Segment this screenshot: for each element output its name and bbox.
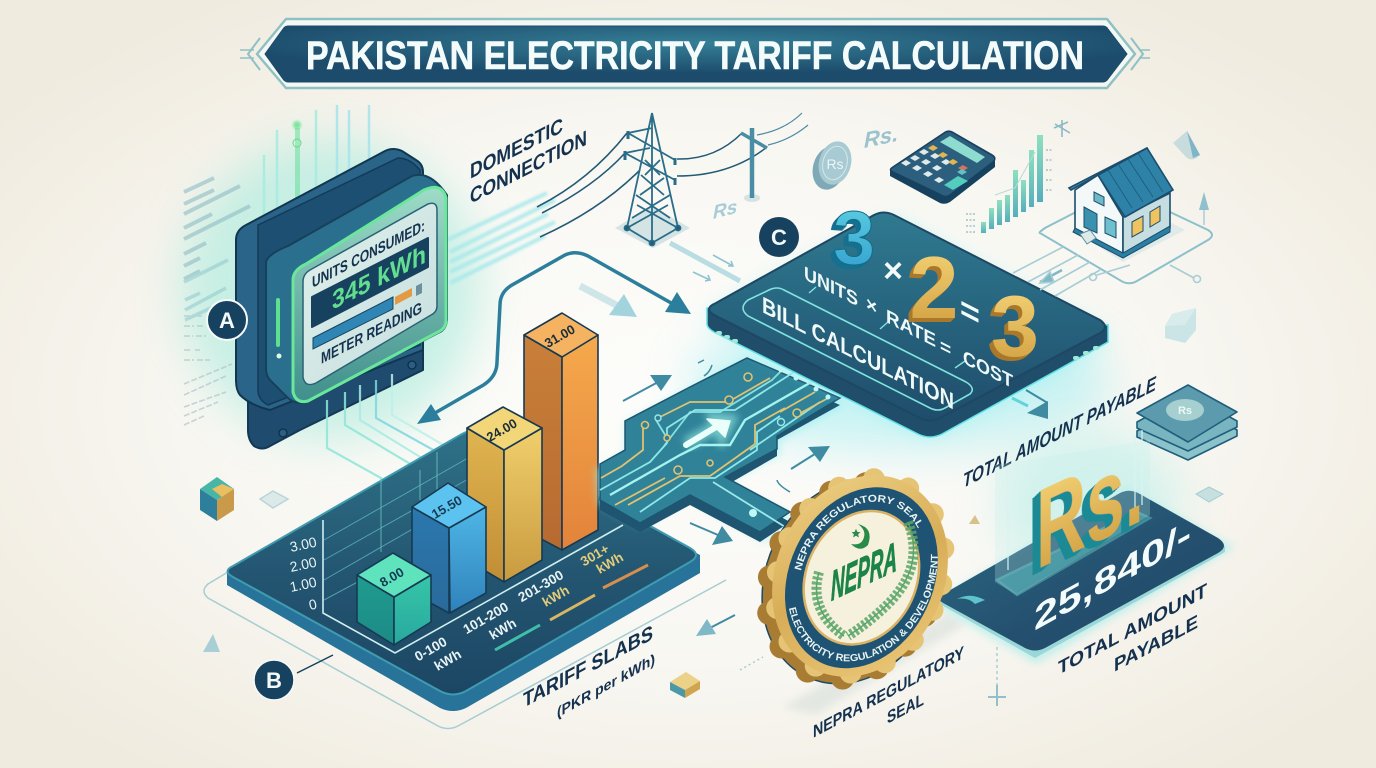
icon: small triangle (969, 515, 980, 524)
icon: money stack (1137, 385, 1237, 460)
y axis labels (288, 534, 318, 613)
decorations upper right (1165, 131, 1209, 343)
icon: cone (1173, 131, 1200, 159)
LED pill (276, 300, 280, 345)
seal: NEPRA: NEPRA (831, 533, 897, 610)
title text: PAKISTAN ELECTRICITY TARIFF CALCULATION (306, 34, 1084, 78)
icon: money stack: Rs (1178, 405, 1192, 417)
crescent and star (851, 524, 870, 549)
arrow toward seal bottom (696, 615, 735, 636)
big rs symbol: Rs. (1036, 418, 1144, 594)
bar: 0-100 (357, 553, 431, 645)
panel A: meter (236, 105, 447, 448)
rs labels and coin (713, 121, 898, 224)
house walls (1075, 175, 1123, 255)
chart outline (204, 572, 726, 728)
icon: cube (200, 477, 234, 521)
rs label: Rs. (864, 121, 898, 153)
arrow down from calculation (1012, 390, 1048, 419)
cream centre (782, 492, 940, 664)
seal: NEPRA: NEPRA REGULATORY SEAL (794, 494, 922, 570)
label: total amount payable bottom: PAYABLE (1114, 611, 1198, 677)
door and windows (1084, 207, 1097, 233)
progress bar (313, 297, 393, 349)
platform (227, 432, 700, 711)
x axis labels: kWh (540, 582, 572, 610)
panel C: bill calculation: COST (963, 347, 1014, 393)
circuit traces (600, 372, 830, 530)
icon: rs coin: Rs (826, 156, 844, 172)
arrow up right 2 (791, 446, 830, 469)
badge C (759, 217, 799, 257)
badge A: A (219, 308, 235, 333)
bill calculation box (743, 288, 972, 410)
panel C: bill calculation: = (940, 335, 951, 361)
meter reading label: METER READING (321, 298, 422, 368)
icon: glowing arrow (686, 418, 730, 445)
label: nepra regulatory seal (813, 642, 964, 742)
house plot (1040, 212, 1212, 283)
icon: up arrow (1203, 200, 1205, 225)
decorative data lines left of meter (184, 178, 250, 425)
icon: triangle (203, 634, 220, 652)
streams from meter to chart (327, 374, 445, 500)
label: nepra regulatory seal: NEPRA REGULATORY (813, 642, 964, 742)
numeral 2 gold: 2 (910, 238, 958, 337)
small mark (957, 596, 985, 604)
arrows around connector (623, 360, 830, 636)
y axis labels: 3.00 (288, 534, 318, 555)
circuit connector (595, 358, 845, 542)
arrow down right (690, 523, 733, 545)
panel C: bill calculation: RATE (886, 306, 936, 352)
arrow up right (623, 375, 672, 401)
bar: 301+ (524, 313, 598, 550)
legend dashes (495, 625, 540, 650)
badge A (207, 300, 247, 340)
bill calculation text: BILL CALCULATION (762, 292, 954, 415)
meter green frame (293, 187, 446, 402)
meter lower mount (248, 300, 423, 448)
seal edge (729, 449, 975, 713)
formula words: UNITS (804, 263, 858, 311)
icon: small diamond (1196, 487, 1223, 502)
panel C: bill calculation (707, 196, 1108, 437)
x axis labels: 101-200 (461, 599, 511, 637)
seal: NEPRA: ELECTRICITY REGULATION & DEVELOPMENT (789, 554, 938, 662)
house roof (1098, 148, 1173, 217)
bar: 101-200: 15.50 (429, 492, 465, 522)
seal face (740, 446, 980, 706)
ring lettering (801, 502, 922, 571)
glow base (997, 512, 1150, 595)
icon: diamond (260, 491, 288, 508)
icon: calculator (890, 131, 995, 204)
icon: glass cube (1165, 308, 1196, 343)
x axis labels: 301+ (578, 541, 612, 569)
house lines to panel (1013, 247, 1200, 296)
axis (323, 520, 623, 653)
label: total amount payable bottom: TOTAL AMOUNT (1058, 580, 1208, 680)
label: domestic connection: CONNECTION (470, 126, 587, 209)
meter back body (236, 149, 423, 410)
bar: 101-200 (412, 483, 486, 613)
icon: utility pole (741, 128, 767, 202)
seal ground shadow (783, 613, 965, 715)
navy ring (756, 462, 966, 693)
badge B: B (266, 668, 282, 693)
x axis labels: 0-100 (412, 634, 449, 664)
icon: power lines and streams (447, 113, 808, 283)
icon: rs coin (808, 138, 856, 193)
numeral 3 gold: 3 (991, 279, 1039, 375)
equals sign: = (960, 287, 980, 336)
icon: transmission tower (615, 113, 740, 281)
meter screen (303, 203, 437, 385)
dashed vertical (996, 647, 998, 688)
dotted line (740, 657, 763, 670)
label: nepra regulatory seal: SEAL (887, 688, 924, 728)
icon: house (1040, 148, 1212, 283)
bar: 201-300 (467, 407, 542, 582)
badge B (254, 655, 333, 700)
345 kWh reading: 345 kWh (332, 239, 426, 316)
badge C: C (771, 225, 787, 250)
x axis labels: 201-300 (516, 567, 566, 605)
y axis labels: 1.00 (288, 574, 318, 595)
rs label near tower: Rs (713, 197, 738, 224)
pale arrow (580, 286, 637, 317)
dark display (312, 238, 428, 327)
meter blue frame (266, 175, 447, 403)
x axis labels (412, 541, 626, 674)
background glows (180, 140, 1180, 570)
bar: 201-300: 24.00 (484, 415, 520, 445)
icon: small compass cross (1054, 120, 1070, 137)
glow streams above meter (264, 105, 369, 222)
x axis labels: kWh (487, 615, 519, 643)
wreath (816, 522, 914, 636)
panel B: tariff slabs chart (204, 313, 726, 728)
icon: plus (988, 685, 1006, 706)
label: total amount payable top: TOTAL AMOUNT PAYABLE (963, 371, 1157, 493)
amount: 25,840/- (1034, 512, 1191, 638)
seal: NEPRA (757, 468, 954, 690)
small bar chart (966, 135, 1052, 233)
panel: total amount card (931, 418, 1235, 664)
label: tariff slabs: (PKR per kWh) (557, 651, 655, 722)
bar: 0-100: 8.00 (377, 564, 406, 590)
label: tariff slabs: TARIFF SLABS (523, 620, 653, 713)
y axis labels: 2.00 (288, 554, 318, 575)
small decorations left (200, 477, 288, 652)
x axis labels: kWh (594, 549, 626, 577)
hologram beam (995, 440, 1150, 595)
times sign: × (883, 252, 903, 290)
panel C: bill calculation: × (866, 293, 877, 319)
decorations lower right (670, 487, 1223, 706)
chart gridlines (324, 452, 475, 600)
numeral 3 blue: 3 (833, 196, 875, 281)
bar: 301+: 31.00 (542, 321, 578, 351)
units consumed label: UNITS CONSUMED: (312, 216, 425, 292)
y axis labels: 0 (307, 596, 318, 613)
icon: small rs box (670, 672, 700, 698)
label: domestic connection: DOMESTIC (470, 113, 563, 184)
title banner (240, 19, 1150, 88)
small arrows near tower (693, 255, 733, 281)
x axis labels: kWh (432, 646, 464, 674)
arrow: loop from calculation to chart and meter (417, 253, 691, 424)
